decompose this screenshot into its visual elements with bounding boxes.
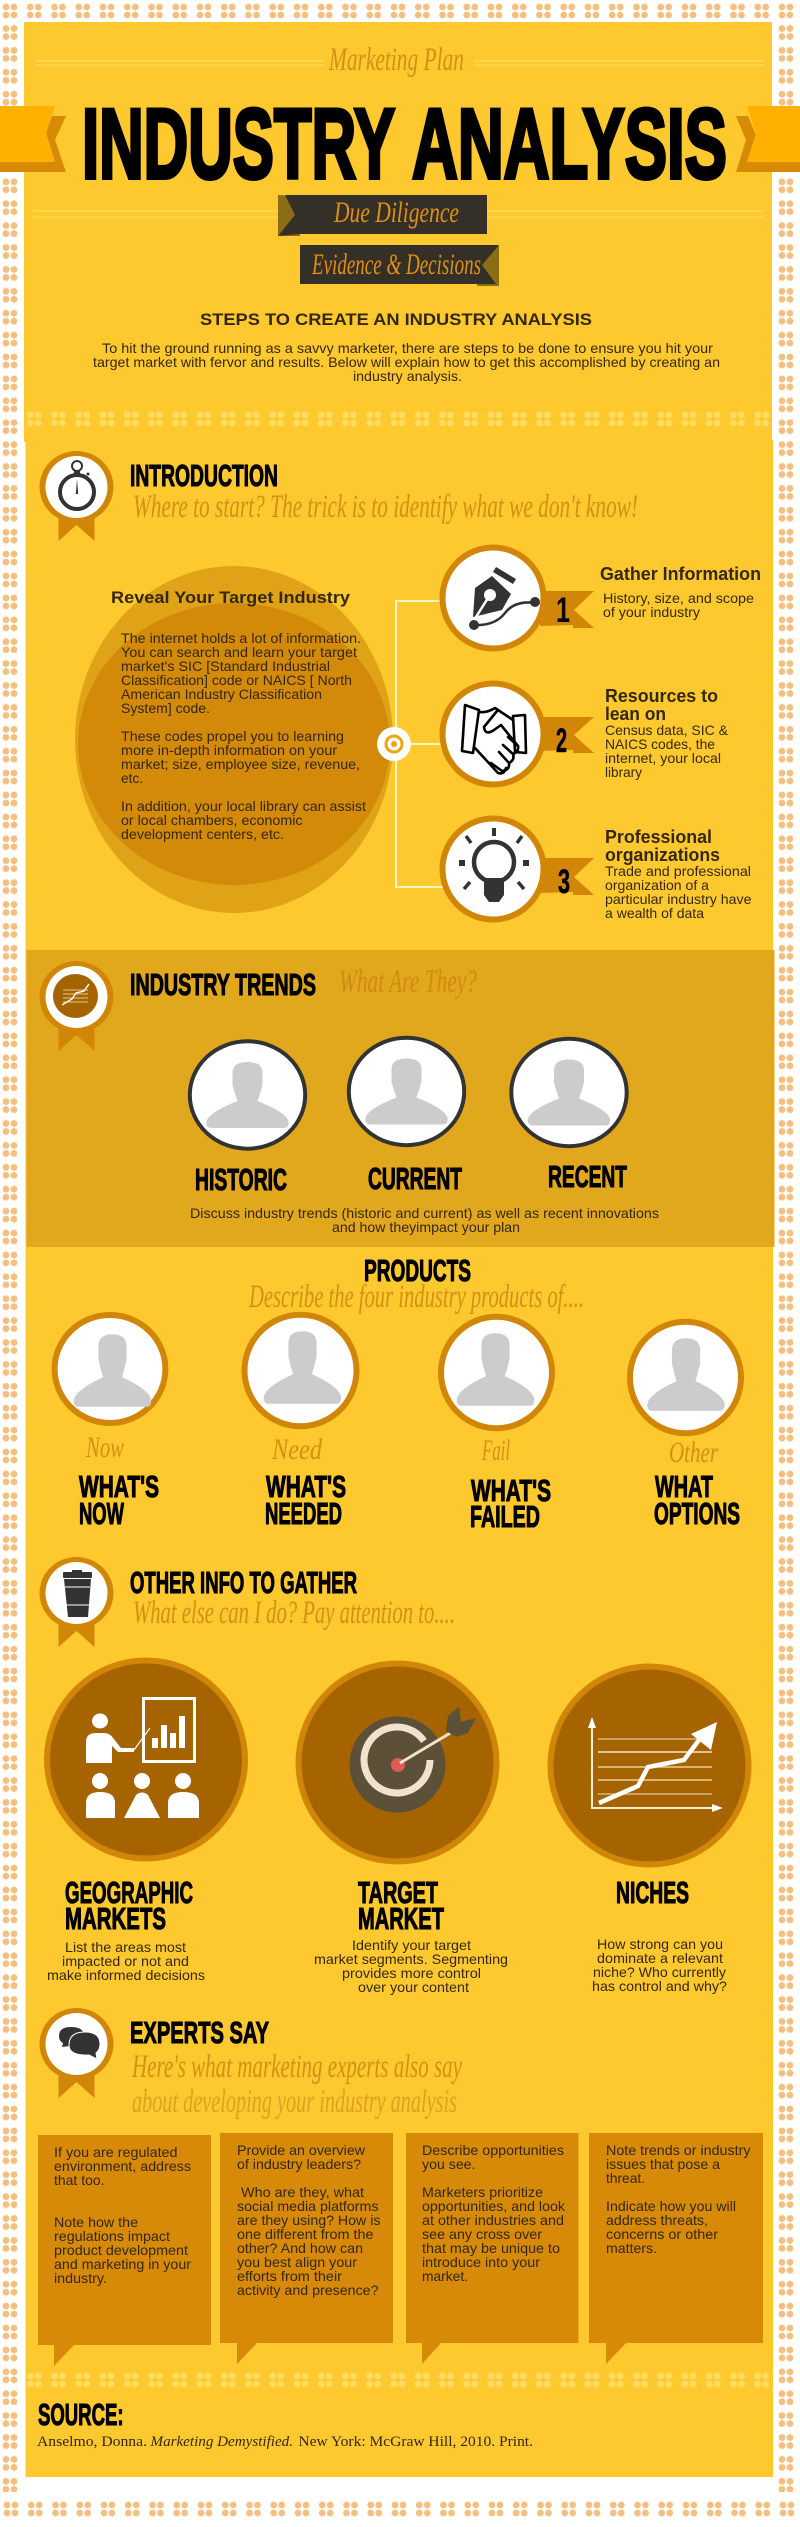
source (37, 2397, 533, 2450)
callout 4: Indicate how you will (606, 2198, 736, 2214)
card: target market (298, 1664, 508, 1995)
card: target market: TARGET (358, 1875, 438, 1910)
section: other info (40, 1557, 748, 1995)
callout 1: environment, address (54, 2158, 191, 2174)
callout 2: social media platforms (237, 2198, 378, 2214)
intro paragraph: target market with fervor and results. Below will explain how to get this accomplished by creating an (93, 354, 720, 370)
step 2: NAICS codes, the (605, 736, 715, 752)
product: needed: NEEDED (265, 1496, 342, 1531)
callout 4: address threats, (606, 2212, 708, 2228)
large circle with text (75, 566, 393, 913)
card: geographic markets: make informed decisions (47, 1967, 205, 1983)
icon: light bulb (459, 828, 529, 902)
section: experts say (38, 2008, 763, 2366)
large circle with text: development centers, etc. (121, 826, 284, 842)
card: target market: provides more control (342, 1965, 481, 1981)
product: options: WHAT (655, 1469, 713, 1504)
badge: coffee cup (40, 1557, 114, 1647)
step 2: 2 (556, 722, 567, 760)
callout 1: and marketing in your (54, 2256, 191, 2272)
callout 2: efforts from their (237, 2268, 342, 2284)
steps heading: STEPS TO CREATE AN INDUSTRY ANALYSIS (200, 310, 592, 329)
step 2: lean on (605, 704, 666, 724)
icon: target (350, 1707, 476, 1812)
connector lines (396, 601, 445, 887)
decorative script: Marketing Plan (36, 42, 764, 78)
callout 2: of industry leaders? (237, 2156, 361, 2172)
callout 1: product development (54, 2242, 188, 2258)
card: geographic markets: impacted or not and (62, 1953, 189, 1969)
product: now: Now (85, 1431, 124, 1464)
large circle with text: The internet holds a lot of information. (121, 630, 361, 646)
step 3: organization of a (605, 877, 709, 893)
callout 2: activity and presence? (237, 2282, 379, 2298)
callout 4 (589, 2133, 763, 2364)
product: now (55, 1315, 165, 1531)
step 2: internet, your local (605, 750, 721, 766)
callout 3: at other industries and (422, 2212, 564, 2228)
callout 3: you see. (422, 2156, 476, 2172)
large circle with text: These codes propel you to learning (121, 728, 344, 744)
step 1: History, size, and scope (603, 590, 754, 606)
callout 3: that may be unique to (422, 2240, 560, 2256)
card: target market: MARKET (358, 1901, 444, 1936)
section: products (55, 1253, 741, 1534)
heading: introduction: INTRODUCTION (130, 458, 278, 493)
icon: growth chart (588, 1717, 723, 1812)
product: now: NOW (79, 1496, 124, 1531)
product: needed: WHAT'S (266, 1469, 346, 1504)
card: target market: Identify your target (352, 1937, 471, 1953)
large circle with text: System] code. (121, 700, 210, 716)
citation: Anselmo, Donna. (37, 2434, 147, 2450)
card: geographic markets: MARKETS (65, 1901, 166, 1936)
step 2 (442, 684, 729, 784)
card: geographic markets (47, 1660, 245, 1983)
subtitle: What Are They? (339, 964, 477, 1000)
callout 3: opportunities, and look (422, 2198, 566, 2214)
card: target market: market segments. Segmenting (314, 1951, 508, 1967)
intro paragraph: To hit the ground running as a savvy marketer, there are steps to be done to ensure you hit your (102, 340, 713, 356)
badge: stopwatch (40, 451, 114, 541)
source heading: SOURCE: (38, 2397, 124, 2432)
callout 3: introduce into your (422, 2254, 540, 2270)
callout 3 (406, 2133, 578, 2364)
product: failed: WHAT'S (471, 1473, 551, 1508)
product: now: WHAT'S (79, 1469, 159, 1504)
product: failed: FAILED (470, 1499, 540, 1534)
right ribbon (736, 106, 800, 172)
large circle with text: etc. (121, 770, 143, 786)
callout 3: Describe opportunities (422, 2142, 564, 2158)
subtitle: What else can I do? Pay attention to.... (133, 1595, 455, 1631)
step 3: Professional (605, 827, 712, 847)
title: INDUSTRY (82, 88, 395, 199)
icon: presentation (86, 1698, 199, 1818)
icon: pen nib (469, 567, 540, 630)
step 2: Resources to (605, 686, 718, 706)
header (0, 42, 800, 384)
subtitle: about developing your industry analysis (132, 2084, 457, 2120)
callout 1: Note how the (54, 2214, 138, 2230)
callout 4: matters. (606, 2240, 657, 2256)
card: niches: How strong can you (597, 1936, 723, 1952)
heading: experts say: EXPERTS SAY (130, 2015, 269, 2050)
card: niches: dominate a relevant (597, 1950, 723, 1966)
card: niches: NICHES (616, 1875, 689, 1910)
large circle with text: market; size, employee size, revenue, (121, 756, 360, 772)
large circle with text: American Industry Classification (121, 686, 322, 702)
card: niches: has control and why? (592, 1978, 727, 1994)
badge: trend chart (40, 961, 114, 1051)
step 3 (442, 818, 752, 921)
large circle with text: or local chambers, economic (121, 812, 302, 828)
callout 2 (220, 2133, 393, 2364)
callout 1: regulations impact (54, 2228, 170, 2244)
callout 2: Who are they, what (241, 2184, 364, 2200)
panel: industry trends (26, 950, 774, 1247)
portrait: current: CURRENT (368, 1161, 462, 1196)
citation (37, 2434, 533, 2450)
step 2: library (605, 764, 642, 780)
icon: handshake (462, 705, 526, 773)
intro paragraph: industry analysis. (353, 368, 462, 384)
large circle with text: more in-depth information on your (121, 742, 337, 758)
callout 3: Marketers prioritize (422, 2184, 543, 2200)
step 1: 1 (556, 591, 570, 630)
large circle with text: You can search and learn your target (121, 644, 357, 660)
large circle with text: In addition, your local library can assist (121, 798, 366, 814)
callout 2: one different from the (237, 2226, 374, 2242)
subtitle (131, 2049, 462, 2120)
heading: industry trends: INDUSTRY TRENDS (130, 967, 316, 1002)
callout 1 (38, 2135, 211, 2366)
card: geographic markets: List the areas most (65, 1939, 186, 1955)
product: needed (244, 1315, 356, 1531)
callout 4: issues that pose a (606, 2156, 720, 2172)
step 3: organizations (605, 845, 720, 865)
card: niches (550, 1666, 748, 1994)
product: failed (441, 1317, 552, 1534)
subtitle: Describe the four industry products of.... (248, 1279, 584, 1315)
product: options: OPTIONS (654, 1496, 740, 1531)
callout 3: see any cross over (422, 2226, 542, 2242)
decorative script: Marketing Plan: Marketing Plan (328, 42, 464, 78)
trends text: and how theyimpact your plan (332, 1219, 520, 1235)
card: niches: niche? Who currently (593, 1964, 726, 1980)
portrait: recent (511, 1039, 627, 1194)
step 3: 3 (558, 863, 570, 901)
callout 2: are they using? How is (237, 2212, 380, 2228)
card: target market: over your content (358, 1979, 469, 1995)
callout 1: that too. (54, 2172, 104, 2188)
large circle with text: Classification] code or NAICS [ North (121, 672, 352, 688)
heading: other info: OTHER INFO TO GATHER (130, 1565, 357, 1600)
large circle with text: Reveal Your Target Industry (111, 588, 351, 607)
intro paragraph (93, 340, 720, 384)
product: failed: Fail (481, 1434, 510, 1467)
step 2: Census data, SIC & (605, 722, 729, 738)
callout 2: Provide an overview (237, 2142, 366, 2158)
callout 2: other? And how can (237, 2240, 363, 2256)
centre target (377, 727, 411, 761)
trends text (190, 1205, 659, 1235)
left ribbon (0, 106, 66, 172)
banner: Due Diligence (278, 195, 487, 236)
callout 4: threat. (606, 2170, 645, 2186)
subtitle: Here's what marketing experts also say (131, 2049, 462, 2085)
step 3: Trade and professional (605, 863, 751, 879)
portrait: historic: HISTORIC (195, 1162, 287, 1197)
step 1: Gather Information (600, 564, 761, 584)
banner: Evidence and Decisions (300, 245, 499, 286)
double rule behind banners (33, 211, 763, 217)
trends text: Discuss industry trends (historic and current) as well as recent innovations (190, 1205, 659, 1221)
large circle with text: market's SIC [Standard Industrial (121, 658, 330, 674)
callout 4: concerns or other (606, 2226, 718, 2242)
step 3: particular industry have (605, 891, 752, 907)
step 3: a wealth of data (605, 905, 704, 921)
callout 4: Note trends or industry (606, 2142, 750, 2158)
callout 2: you best align your (237, 2254, 357, 2270)
banner: Evidence and Decisions: Evidence & Decisions (311, 248, 481, 281)
citation: New York: McGraw Hill, 2010. Print. (298, 2434, 533, 2450)
callout 3: market. (422, 2268, 468, 2284)
badge: chat bubbles (40, 2008, 114, 2098)
card: geographic markets: GEOGRAPHIC (65, 1875, 193, 1910)
step 1 (442, 548, 761, 648)
banner: Due Diligence: Due Diligence (333, 196, 459, 229)
section: introduction (40, 451, 761, 921)
citation: Marketing Demystified. (149, 2434, 293, 2450)
portrait: historic (190, 1041, 305, 1197)
callout 1: If you are regulated (54, 2144, 178, 2160)
portrait: current (349, 1038, 464, 1196)
step 1: of your industry (603, 604, 700, 620)
heading: products: PRODUCTS (364, 1253, 471, 1288)
portrait: recent: RECENT (548, 1159, 627, 1194)
product: needed: Need (271, 1433, 323, 1466)
product: options (630, 1322, 741, 1531)
callout 1: industry. (54, 2270, 107, 2286)
product: options: Other (669, 1436, 718, 1469)
